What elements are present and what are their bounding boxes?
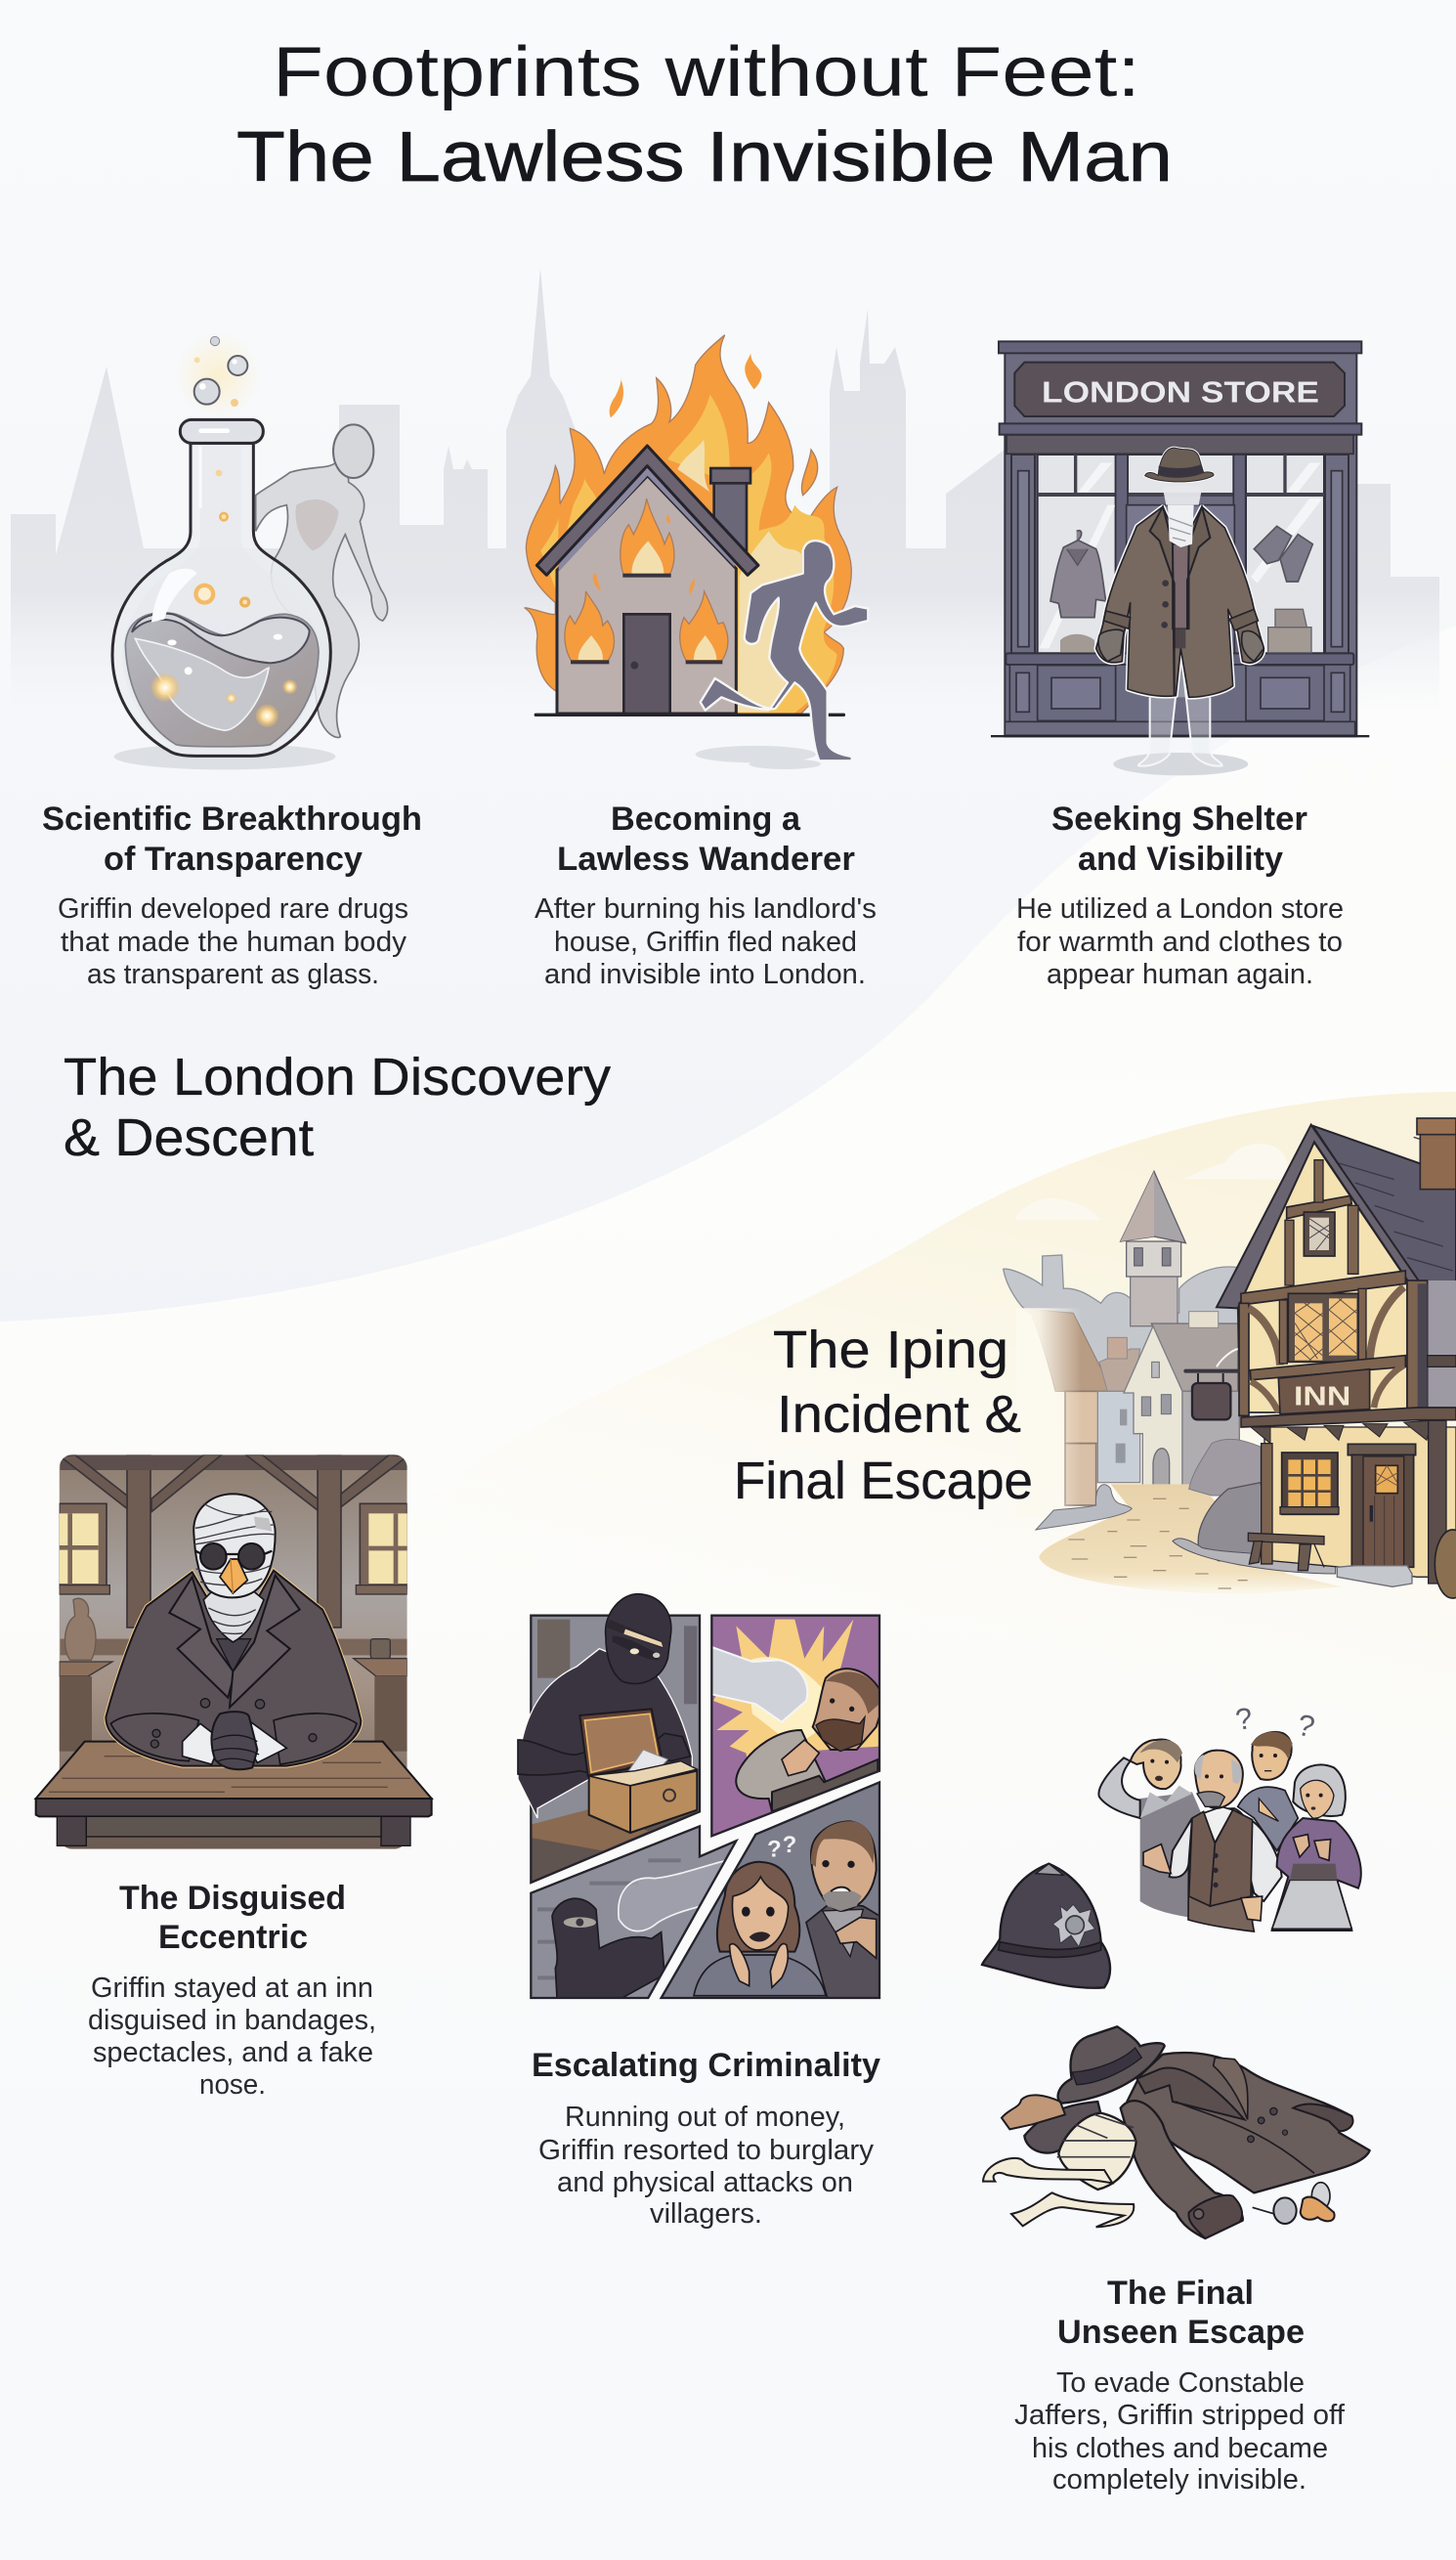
sleeves and hands (110, 1714, 198, 1761)
bandages (1058, 2113, 1136, 2190)
section heading: Iping: Final Escape (734, 1452, 1033, 1510)
coat (1096, 506, 1263, 697)
spectacles and nose (1253, 2207, 1280, 2216)
heading: Scientific Breakthrough (42, 801, 422, 838)
heading (1051, 801, 1307, 878)
illustration: Iping village and inn (1004, 1118, 1456, 1598)
barrel (1435, 1530, 1456, 1598)
icon: crowd of villagers and constable helmet (982, 1702, 1361, 1988)
heading: Becoming a (611, 801, 801, 838)
treasure box (579, 1709, 662, 1776)
description: After burning his landlord's (535, 893, 877, 925)
description: appear human again. (1047, 959, 1313, 990)
man (806, 1903, 879, 1998)
description: house, Griffin fled naked (554, 927, 857, 958)
hat (1058, 2026, 1165, 2104)
description: and invisible into London. (544, 959, 866, 990)
description: and physical attacks on (557, 2167, 853, 2198)
label: inn sign: INN (1294, 1380, 1350, 1410)
label: shop sign: LONDON STORE (1042, 376, 1319, 410)
villager left (1140, 1792, 1202, 1919)
title: Footprints without Feet: (273, 33, 1140, 111)
woman (1272, 1818, 1361, 1931)
question marks: ? (1295, 1709, 1317, 1744)
villager back (1238, 1787, 1298, 1850)
description (88, 1973, 376, 2101)
title: The Lawless Invisible Man (236, 118, 1173, 196)
panel: seeking shelter (991, 341, 1369, 990)
heading: Escalating Criminality (532, 2047, 880, 2084)
heading: Unseen Escape (1057, 2314, 1305, 2351)
bushes (1189, 1439, 1261, 1496)
icon: flask and transparent man (112, 332, 388, 769)
description: Jaffers, Griffin stripped off (1014, 2400, 1346, 2431)
coat body (1127, 2053, 1370, 2192)
comic panel 3 (531, 1826, 740, 1999)
description: Griffin stayed at an inn (91, 1973, 373, 2004)
question marks: ? (767, 1836, 782, 1862)
description (1016, 893, 1344, 990)
panel: final unseen escape (982, 1702, 1370, 2495)
ghost legs (1138, 648, 1222, 766)
heading (557, 801, 855, 878)
distant trees and chimney (1004, 1255, 1238, 1366)
bench (1248, 1533, 1324, 1544)
section heading: Iping: The Iping (773, 1321, 1008, 1379)
burglar (518, 1649, 692, 1818)
coat (106, 1571, 361, 1766)
panel: lawless wanderer (525, 335, 877, 990)
icon: comic panels of burglary and attacks (518, 1594, 884, 2001)
description (1014, 2367, 1346, 2495)
icon: bandaged man at inn table (36, 1454, 432, 1849)
description (535, 893, 877, 990)
heading: The Final (1107, 2275, 1254, 2312)
icon: burning house and runner (525, 335, 868, 769)
panel outlines (531, 1616, 879, 1998)
heading: The Disguised (119, 1880, 346, 1917)
old man (1188, 1808, 1254, 1931)
heading: Eccentric (158, 1919, 308, 1956)
woman (694, 1955, 826, 1996)
heading (119, 1880, 346, 1956)
section heading: London (64, 1048, 611, 1167)
section heading: London: & Descent (64, 1108, 314, 1167)
description: Griffin resorted to burglary (538, 2135, 874, 2166)
question marks: ? (1233, 1702, 1255, 1737)
heading: of Transparency (104, 841, 363, 878)
description: He utilized a London store (1016, 893, 1344, 925)
helmet (982, 1864, 1110, 1988)
icon: abandoned clothes (983, 2026, 1370, 2238)
left house (1029, 1309, 1112, 1391)
church tower (1131, 1276, 1178, 1326)
description (58, 893, 408, 990)
description: nose. (199, 2069, 266, 2101)
section heading: Iping: Incident & (777, 1385, 1021, 1444)
heading: and Visibility (1078, 841, 1283, 878)
hat (1145, 448, 1214, 482)
head (203, 1591, 264, 1642)
description: To evade Constable (1056, 2367, 1305, 2399)
section heading: Iping (734, 1321, 1033, 1510)
heading: Seeking Shelter (1051, 801, 1307, 838)
panel: escalating criminality (518, 1594, 884, 2230)
panel: disguised eccentric (36, 1454, 432, 2101)
comic panel 2 (711, 1616, 884, 1837)
description: his clothes and became (1032, 2433, 1328, 2464)
sleeve rear and arm (1024, 2102, 1104, 2153)
description: spectacles, and a fake (93, 2037, 373, 2068)
description: Griffin developed rare drugs (58, 893, 408, 925)
heading (42, 801, 422, 878)
section heading: London: The London Discovery (64, 1048, 611, 1106)
hanging sign (1183, 1368, 1239, 1373)
long sleeve (1121, 2101, 1243, 2238)
middle houses (1099, 1349, 1140, 1391)
heading (1057, 2275, 1305, 2351)
question marks (1233, 1702, 1317, 1744)
upper storey (1238, 1141, 1407, 1412)
ground floor (1263, 1427, 1456, 1577)
panel: scientific breakthrough (42, 332, 422, 990)
description: villagers. (650, 2198, 762, 2230)
title (236, 33, 1173, 196)
description: that made the human body (61, 927, 407, 958)
description: completely invisible. (1052, 2464, 1306, 2495)
icon: London store with invisible man (991, 341, 1369, 775)
road (1039, 1484, 1342, 1593)
description (538, 2102, 874, 2230)
gloves (1254, 526, 1312, 582)
coat on hanger (1050, 531, 1106, 618)
comic panel 1 (531, 1616, 701, 1887)
description: Running out of money, (565, 2102, 845, 2133)
inn roof (1312, 1126, 1456, 1290)
comic panel 4: ? (783, 1832, 796, 1858)
description: disguised in bandages, (88, 2005, 376, 2036)
heading: Lawless Wanderer (557, 841, 855, 878)
description: for warmth and clothes to (1017, 927, 1343, 958)
skyline silhouette (11, 268, 1439, 714)
comic panel 4 (662, 1782, 882, 2001)
description: as transparent as glass. (87, 959, 379, 990)
table (36, 1742, 432, 1799)
